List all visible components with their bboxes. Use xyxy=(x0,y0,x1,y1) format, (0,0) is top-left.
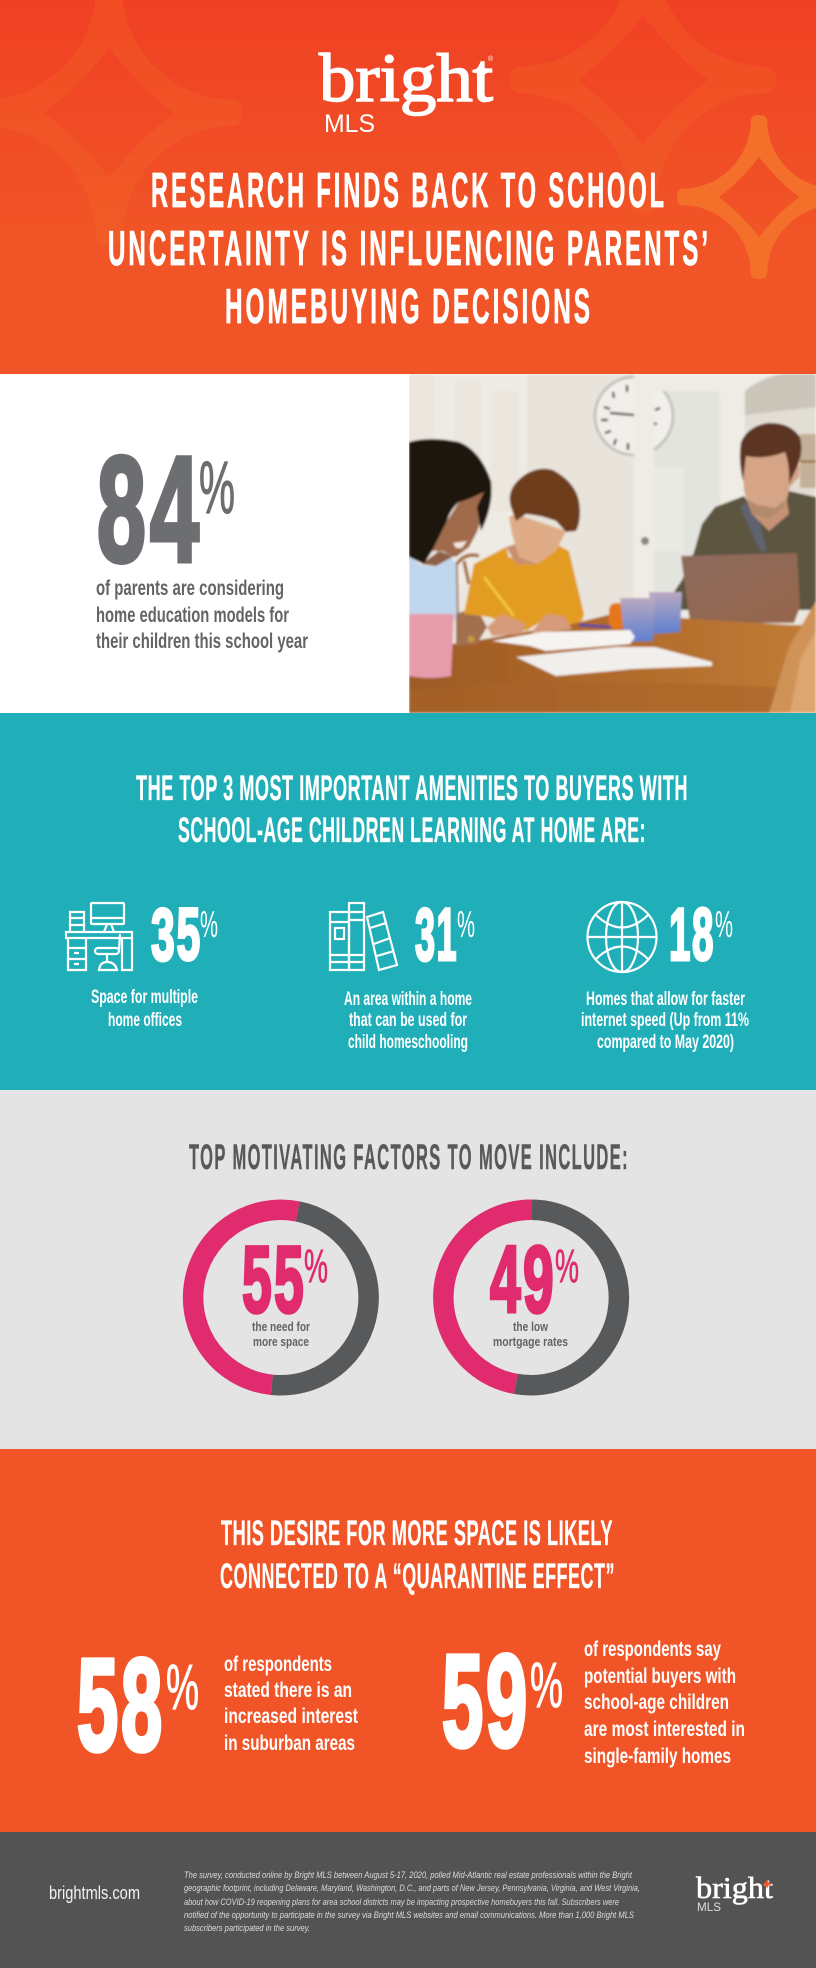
website: brightmls.com xyxy=(49,1883,140,1903)
logo: footer Bright MLS: bright xyxy=(696,1870,773,1905)
logo: Bright MLS: bright xyxy=(319,40,493,116)
caption: faster internet xyxy=(581,989,749,1053)
caption: need for more space: the need for xyxy=(252,1319,310,1334)
stat: 18%: 18 xyxy=(669,893,715,976)
stat: 49%: 49 xyxy=(490,1227,556,1333)
logo: Bright MLS: MLS xyxy=(324,110,375,138)
caption: low mortgage rates xyxy=(493,1319,568,1349)
caption: multiple home offices xyxy=(91,987,198,1031)
caption: need for more space: more space xyxy=(253,1334,309,1349)
disclaimer: geographic footprint, including Delaware, Maryland, Washington, D.C., and parts of New Jersey, Pennsylvania, Virginia, and West Virginia, xyxy=(184,1883,640,1893)
text: parents considering home education xyxy=(96,577,308,653)
caption: homeschooling area: that can be used for xyxy=(349,1010,467,1031)
stat: 84%: 84 xyxy=(97,425,203,593)
logo: Bright MLS: ® xyxy=(488,55,494,63)
panel: header xyxy=(0,0,816,374)
text: parents considering home education: their children this school year xyxy=(96,630,308,653)
text: parents considering home education: of parents are considering xyxy=(96,577,284,600)
disclaimer: The survey, conducted online by Bright MLS between August 5-17, 2020, polled Mid-Atlantic real estate professionals within the Bright xyxy=(184,1870,632,1880)
panel: 84 percent stat xyxy=(0,374,409,713)
stat: 49%: % xyxy=(555,1239,579,1292)
text: suburban interest xyxy=(224,1653,358,1755)
panel: motivating factors xyxy=(0,1090,816,1449)
text: suburban interest: stated there is an xyxy=(224,1679,352,1702)
caption: homeschooling area xyxy=(344,989,472,1053)
stat: 35%: 35 xyxy=(151,893,202,976)
icon: books xyxy=(330,903,397,970)
stat: 58%: 58 xyxy=(77,1631,165,1778)
table xyxy=(409,614,816,713)
heading: quarantine effect xyxy=(220,1514,615,1596)
caption: multiple home offices: home offices xyxy=(108,1010,182,1031)
text: suburban interest: increased interest xyxy=(224,1705,358,1728)
chart: donut 49% xyxy=(443,1210,619,1385)
stat: 18%: % xyxy=(715,904,733,945)
disclaimer: notified of the opportunity to participate in the survey via Bright MLS websites and email communications. More than 1,000 Bright MLS xyxy=(184,1910,634,1920)
text: single-family homes: potential buyers with xyxy=(584,1665,736,1688)
stat: 31% xyxy=(415,893,475,976)
stat: 59%: % xyxy=(530,1649,563,1721)
photo: family at the table xyxy=(409,374,816,713)
chart: donut 55% xyxy=(193,1210,369,1385)
text: suburban interest: of respondents xyxy=(224,1653,332,1676)
woman xyxy=(409,552,457,620)
text: single-family homes: are most interested in xyxy=(584,1718,745,1741)
laptop xyxy=(681,553,800,623)
caption: low mortgage rates: the low xyxy=(513,1319,549,1334)
caption: faster internet: compared to May 2020) xyxy=(597,1032,734,1053)
text: single-family homes: school-age children xyxy=(584,1691,729,1714)
text: suburban interest: in suburban areas xyxy=(224,1732,355,1755)
stat: 31%: 31 xyxy=(415,893,458,976)
disclaimer xyxy=(184,1870,640,1933)
caption: low mortgage rates: mortgage rates xyxy=(493,1334,568,1349)
text: single-family homes: of respondents say xyxy=(584,1638,721,1661)
icon: desk with computer xyxy=(66,903,132,970)
stat: 55%: 55 xyxy=(242,1227,306,1333)
pen, bottle and glasses xyxy=(579,625,611,627)
caption: homeschooling area: An area within a home xyxy=(344,989,472,1010)
boy xyxy=(464,544,584,631)
stat: 31%: % xyxy=(457,904,475,945)
caption: multiple home offices: Space for multiple xyxy=(91,987,198,1008)
panel: quarantine effect xyxy=(0,1449,816,1832)
chair xyxy=(456,555,479,614)
stat: 35%: % xyxy=(200,904,218,945)
icon: globe xyxy=(587,902,657,972)
text: parents considering home education: home education models for xyxy=(96,604,289,627)
stat: 84%: % xyxy=(199,446,235,529)
caption: need for more space xyxy=(252,1319,310,1349)
text: single-family homes: single-family homes xyxy=(584,1745,731,1768)
disclaimer: about how COVID-19 reopening plans for area school districts may be impacting prospective homebuyers this fall. Subscribers were xyxy=(184,1897,619,1907)
stat: 58%: % xyxy=(166,1651,199,1723)
text: single-family homes xyxy=(584,1638,745,1768)
stat: 55%: % xyxy=(304,1239,328,1292)
heading: amenities xyxy=(136,769,688,850)
panel: top 3 amenities xyxy=(0,713,816,1090)
man xyxy=(674,491,816,610)
mug xyxy=(409,614,454,678)
caption: homeschooling area: child homeschooling xyxy=(348,1032,468,1053)
title xyxy=(108,164,711,334)
notebook xyxy=(492,630,635,651)
logo: footer Bright MLS: MLS xyxy=(697,1902,721,1914)
disclaimer: subscribers participated in the survey. xyxy=(184,1923,310,1933)
stat: 59%: 59 xyxy=(442,1627,530,1774)
panel: footer xyxy=(0,1832,816,1968)
